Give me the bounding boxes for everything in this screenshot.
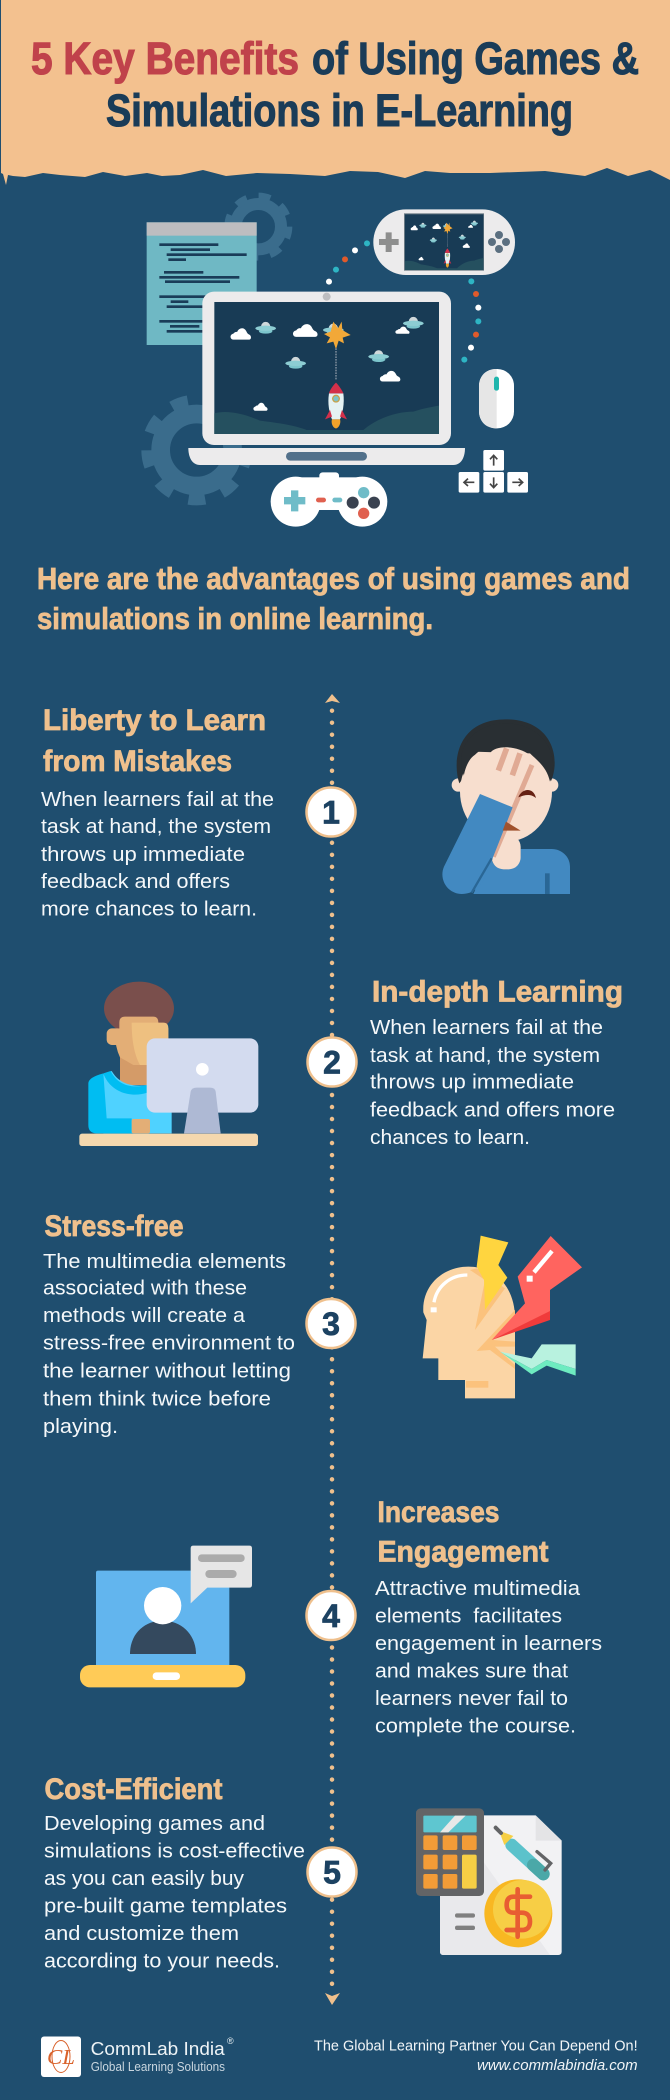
icon: mouse: [479, 369, 514, 428]
body text: and makes sure that: [375, 1660, 568, 1683]
company tagline: Global Learning Solutions: [91, 2059, 225, 2074]
handheld console: [373, 209, 515, 275]
body text: methods will create a: [43, 1304, 246, 1327]
footer tagline and website: [314, 2038, 638, 2074]
body text: [44, 1812, 305, 1973]
body text: [41, 788, 274, 920]
timeline: dotted line with arrows: [325, 694, 340, 2005]
body text: the learner without letting: [43, 1359, 291, 1382]
footer tagline and website: www.commlabindia.com: [477, 2057, 638, 2074]
icon: calculator, document, pen and coin: [416, 1808, 562, 1955]
body text: When learners fail at the: [370, 1016, 603, 1039]
body text: complete the course.: [375, 1714, 576, 1738]
body text: [43, 1250, 295, 1438]
body text: playing.: [43, 1415, 118, 1438]
icon: laptop with avatar and speech bubble: [80, 1546, 252, 1687]
company name: CommLab India: [91, 2039, 226, 2059]
logo mark: [41, 2036, 81, 2077]
body text: associated with these: [43, 1277, 247, 1300]
title: Simulations in E-Learning: [106, 85, 573, 136]
intro heading: [37, 561, 630, 636]
number badge 4: [306, 1591, 356, 1640]
item 5 text: [44, 1773, 305, 1973]
icon: facepalm person: [442, 719, 570, 894]
body text: The multimedia elements: [43, 1250, 286, 1273]
item 4 text: [375, 1496, 602, 1738]
body text: throws up immediate: [370, 1071, 574, 1094]
heading: Stress-free: Stress-free: [44, 1210, 184, 1243]
dotted connector: console to mouse: [461, 278, 481, 363]
heading: Increases Engagement: Engagement: [378, 1536, 549, 1569]
body text: task at hand, the system: [41, 815, 271, 838]
heading: Liberty to Learn from Mistakes: from Mistakes: [43, 745, 232, 778]
item 2 text: [370, 976, 623, 1149]
number badge 2: 2: [323, 1044, 341, 1080]
body text: [370, 1016, 615, 1149]
icon: arrow keys: [459, 450, 528, 493]
body text: [375, 1577, 602, 1738]
icon: stressed head with lightning bolts: [423, 1236, 582, 1398]
number badge 2: [308, 1038, 356, 1086]
number badge 5: [308, 1848, 356, 1896]
heading: Cost-Efficient: Cost-Efficient: [44, 1773, 223, 1806]
heading: Liberty to Learn from Mistakes: Liberty to Learn: [43, 704, 266, 737]
body text: chances to learn.: [370, 1126, 530, 1149]
number badge 5: 5: [323, 1854, 341, 1890]
body text: engagement in learners: [375, 1632, 602, 1655]
logo mark: CL: [47, 2045, 75, 2069]
number badge 3: [306, 1299, 356, 1348]
body text: throws up immediate: [41, 843, 245, 866]
heading: Liberty to Learn from Mistakes: [43, 704, 266, 778]
body text: as you can easily buy: [44, 1867, 245, 1890]
body text: elements facilitates: [375, 1604, 562, 1628]
registered mark: ®: [227, 2036, 234, 2046]
item 3 text: [43, 1210, 295, 1438]
hero illustration: devices and game: [147, 197, 528, 527]
header banner: [1, 0, 670, 185]
body text: task at hand, the system: [370, 1044, 600, 1067]
heading: Increases Engagement: Increases: [378, 1496, 500, 1529]
body text: pre-built game templates: [44, 1895, 287, 1918]
body text: and customize them: [44, 1922, 239, 1945]
body text: feedback and offers more: [370, 1099, 615, 1122]
icon: small gear: [228, 197, 288, 257]
number badge 1: [306, 788, 356, 836]
title: 5 Key Benefits: [31, 33, 299, 84]
body text: When learners fail at the: [41, 788, 274, 811]
body text: learners never fail to: [375, 1687, 568, 1710]
heading: Increases Engagement: [378, 1496, 549, 1569]
number badge 4: 4: [322, 1598, 340, 1634]
icon: large gear: [147, 401, 246, 499]
footer tagline and website: The Global Learning Partner You Can Depend On!: [314, 2038, 638, 2055]
icon: gamepad: [271, 472, 387, 527]
body text: stress-free environment to: [43, 1331, 295, 1354]
body text: more chances to learn.: [41, 898, 257, 920]
body text: feedback and offers: [41, 870, 230, 893]
title: [31, 33, 639, 136]
number badge 1: 1: [322, 794, 340, 830]
laptop: [188, 292, 465, 465]
item 1 text: [41, 704, 274, 920]
icon: learner at computer: [79, 982, 258, 1146]
code document: [147, 222, 257, 345]
body text: Attractive multimedia: [375, 1577, 581, 1600]
body text: according to your needs.: [44, 1950, 280, 1973]
heading: In-depth Learning: In-depth Learning: [372, 976, 623, 1009]
dotted connector: laptop to console: [326, 240, 370, 285]
body text: them think twice before: [43, 1388, 271, 1411]
body text: simulations is cost-effective: [44, 1840, 305, 1863]
intro heading: simulations in online learning.: [37, 601, 433, 636]
number badge 3: 3: [322, 1306, 340, 1342]
footer logo: [41, 2036, 234, 2077]
body text: Developing games and: [44, 1812, 265, 1835]
